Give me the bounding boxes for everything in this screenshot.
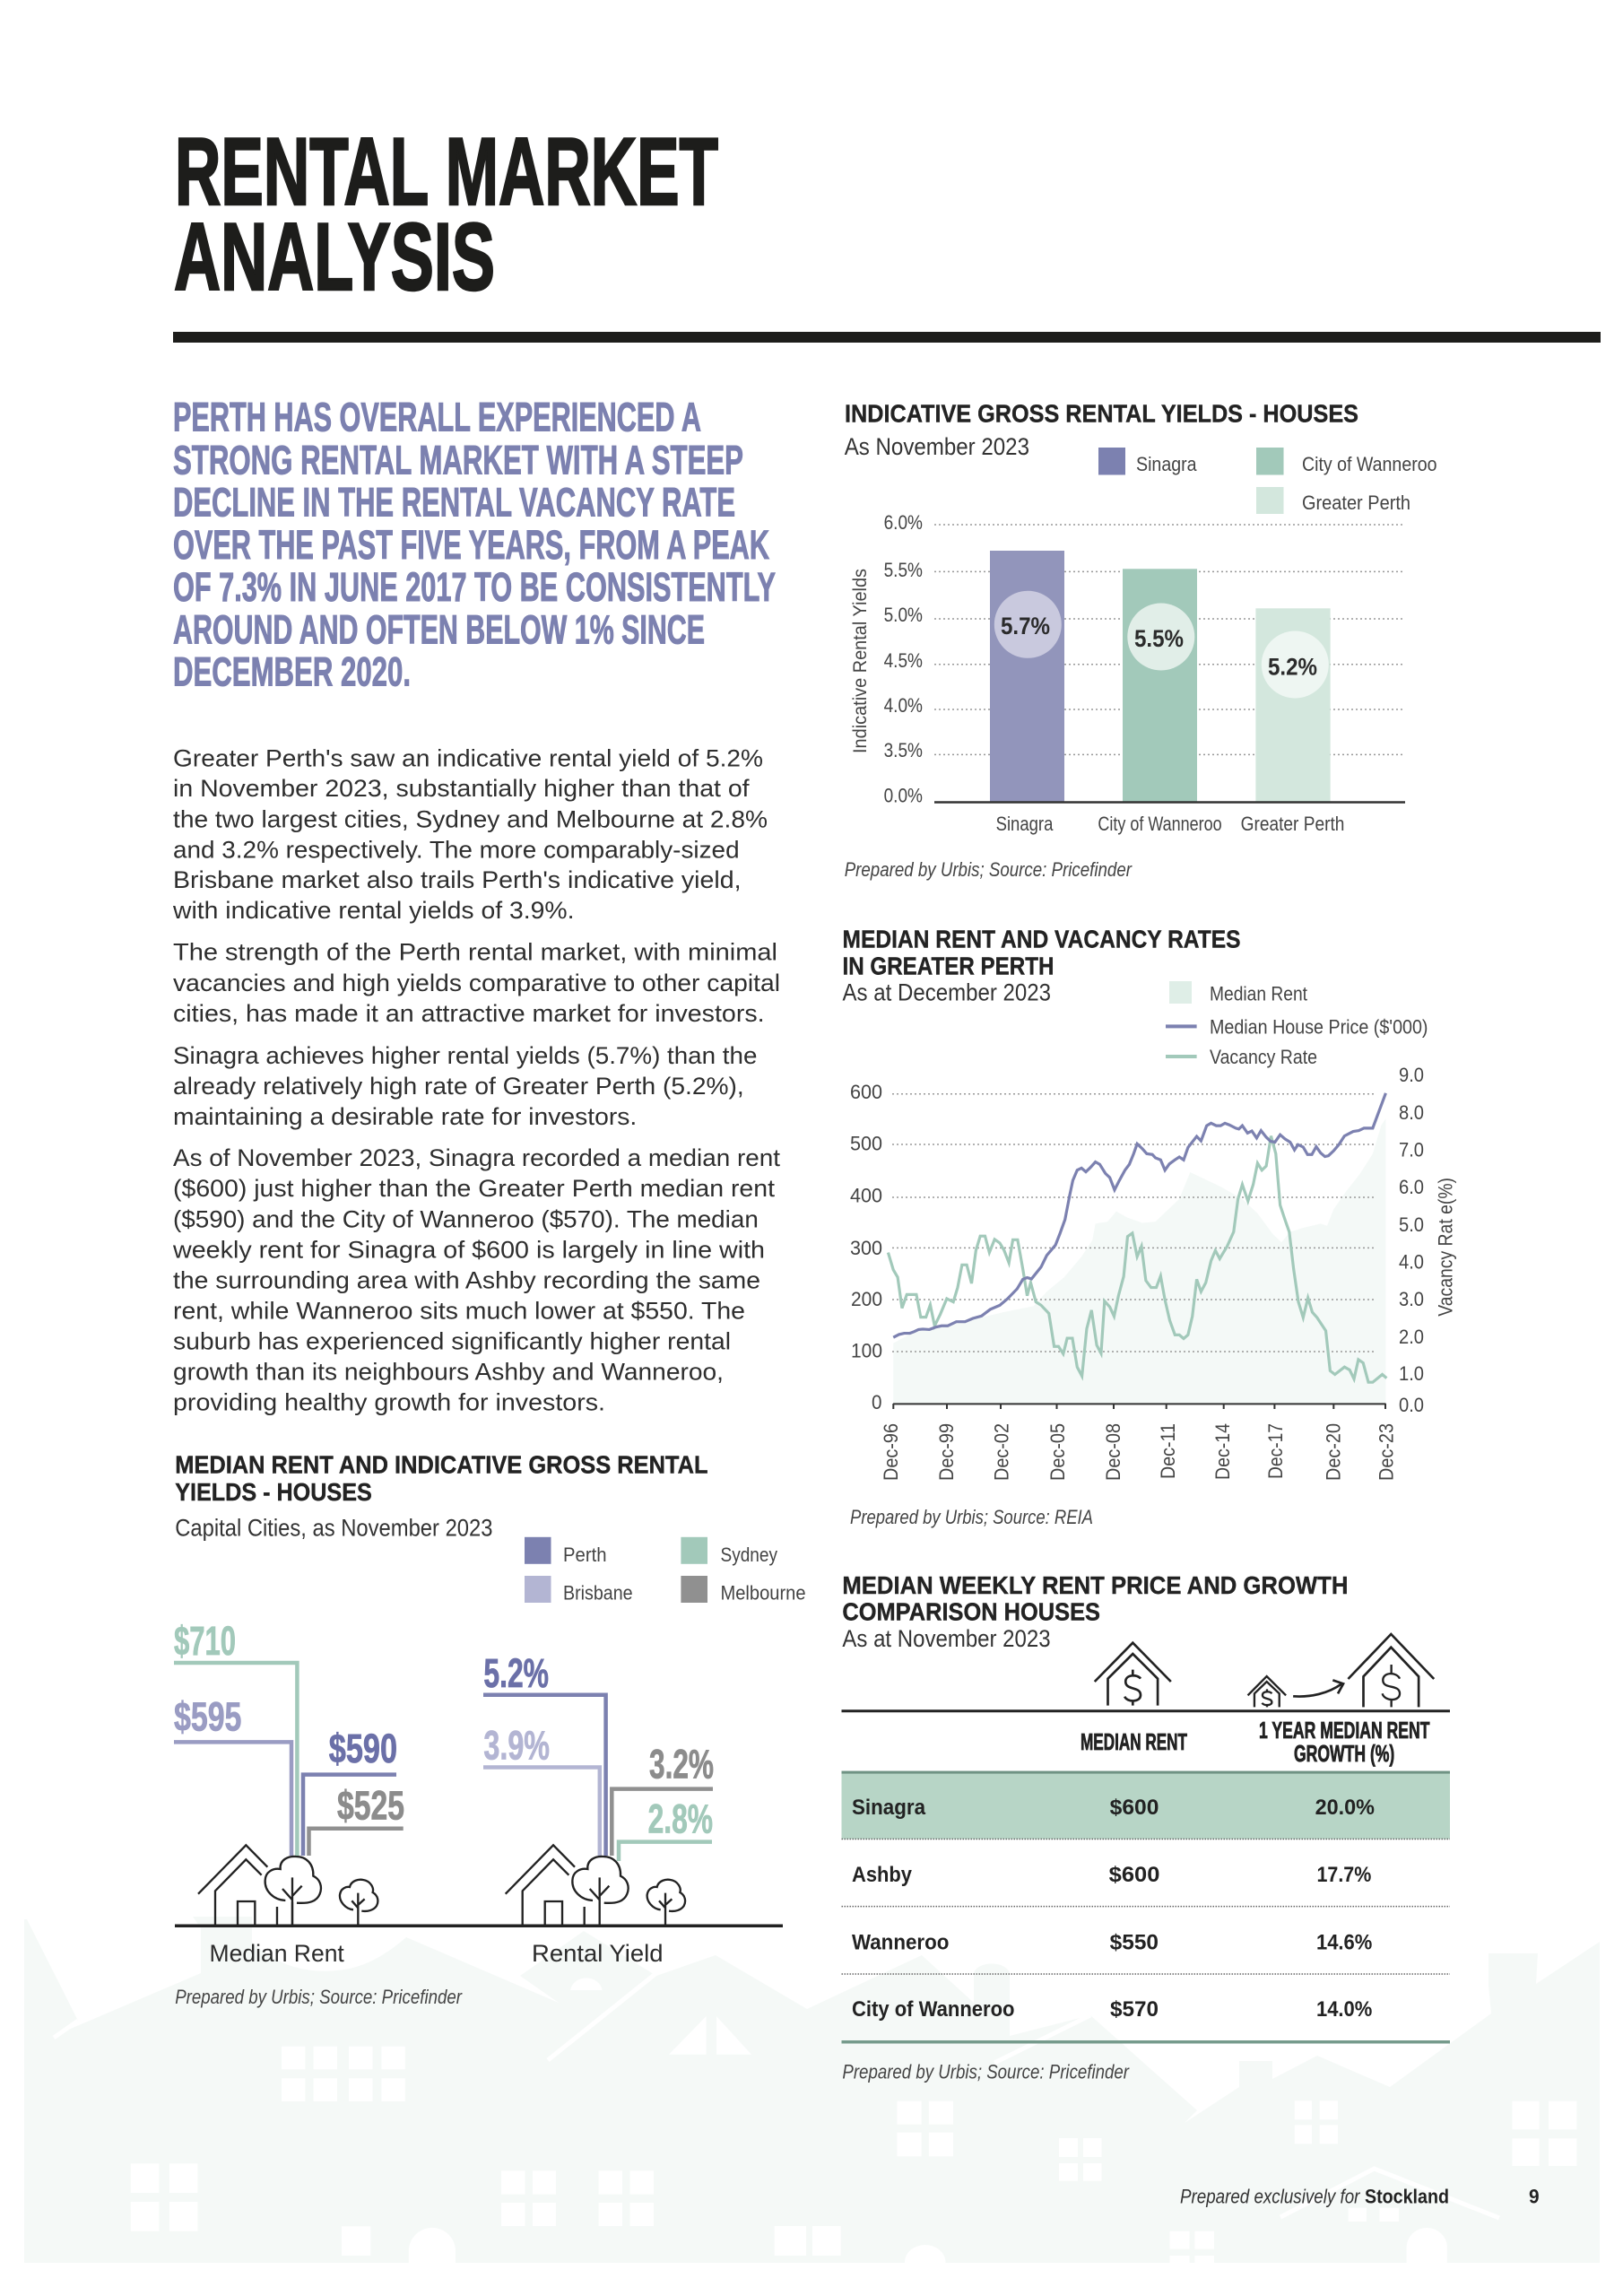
lead statement: STRONG RENTAL MARKET WITH A STEEP <box>173 437 743 483</box>
row: Wanneroo: Wanneroo <box>852 1930 949 1955</box>
x axis labels: Dec-96 <box>880 1423 902 1481</box>
rental yield connectors and values: 3.9% <box>483 1723 550 1769</box>
x axis labels: Dec-99 <box>935 1423 958 1481</box>
body text: vacancies and high yields comparative to other capital <box>173 970 780 996</box>
body text: growth than its neighbours Ashby and Wanneroo, <box>173 1358 724 1385</box>
subheading: Capital Cities, as November 2023 <box>175 1514 492 1541</box>
body text: maintaining a desirable rate for investors. <box>173 1103 637 1130</box>
right axis labels: 8.0 <box>1399 1101 1424 1124</box>
subheading: As at December 2023 <box>843 979 1051 1006</box>
y axis title: Indicative Rental Yields <box>850 569 871 753</box>
axis labels: Median Rent <box>210 1940 344 1967</box>
axis labels: Rental Yield <box>532 1940 664 1967</box>
panel: median rent and vacancy rates line chart <box>843 926 1457 1528</box>
axis labels <box>210 1940 664 1967</box>
category labels: Sinagra <box>996 813 1054 835</box>
row: Sinagra: Sinagra <box>852 1796 926 1820</box>
lead statement: PERTH HAS OVERALL EXPERIENCED A <box>173 395 701 440</box>
row: Ashby <box>852 1863 1371 1887</box>
rental yield connectors and values: 2.8% <box>648 1796 713 1841</box>
x axis labels: Dec-14 <box>1211 1423 1234 1480</box>
bar: City of Wanneroo 5.5%: 5.5% <box>1134 625 1184 652</box>
right axis labels: 3.0 <box>1399 1288 1424 1310</box>
lead statement: DECLINE IN THE RENTAL VACANCY RATE <box>173 479 735 526</box>
bar: Greater Perth 5.2%: 5.2% <box>1268 653 1317 680</box>
footer: Prepared exclusively for <box>1180 2186 1361 2208</box>
background: house silhouettes <box>24 1917 1600 2263</box>
y axis labels: 6.0% <box>884 511 923 534</box>
footer <box>1180 2186 1540 2208</box>
left axis labels: 0 <box>872 1391 882 1413</box>
body text: in November 2023, substantially higher than that of <box>173 775 750 802</box>
heading: INDICATIVE GROSS RENTAL YIELDS - HOUSES <box>845 400 1358 427</box>
x axis labels: Dec-02 <box>991 1423 1013 1481</box>
subheading: As November 2023 <box>845 433 1029 460</box>
median rent connectors and values: $595 <box>174 1693 241 1740</box>
legend: Sinagra <box>1136 453 1197 475</box>
legend: Melbourne <box>721 1582 805 1604</box>
line: median house price <box>893 1093 1385 1337</box>
body text <box>172 744 781 1415</box>
left axis labels: 200 <box>851 1288 882 1310</box>
body text: weekly rent for Sinagra of $600 is largely in line with <box>172 1236 765 1263</box>
legend: Median House Price ($'000) <box>1210 1016 1428 1039</box>
row: Wanneroo: $550 <box>1110 1930 1159 1955</box>
legend: Vacancy Rate <box>1210 1046 1317 1068</box>
rental yield connectors and values: 3.2% <box>649 1742 714 1787</box>
category labels: City of Wanneroo <box>1098 813 1222 835</box>
x axis labels: Dec-08 <box>1102 1423 1124 1481</box>
legend: Sydney <box>721 1544 777 1566</box>
x axis labels <box>880 1423 1398 1481</box>
icon: house and trees (rental yield) <box>506 1845 685 1926</box>
heading: COMPARISON HOUSES <box>842 1598 1100 1625</box>
body text: Brisbane market also trails Perth's indicative yield, <box>173 866 741 893</box>
x axis labels: Dec-17 <box>1264 1423 1287 1479</box>
y axis labels: 4.0% <box>884 694 923 717</box>
legend <box>525 1537 805 1604</box>
row: Sinagra: 20.0% <box>1315 1796 1375 1820</box>
body text: already relatively high rate of Greater Perth (5.2%), <box>173 1073 744 1100</box>
x axis labels: Dec-20 <box>1323 1423 1345 1481</box>
body text: Greater Perth's saw an indicative rental yield of 5.2% <box>173 744 763 771</box>
x axis with ticks <box>893 1404 1386 1409</box>
area: median rent <box>893 1118 1385 1405</box>
column headers: GROWTH (%) <box>1294 1740 1394 1767</box>
source: Prepared by Urbis; Source: Pricefinder <box>842 2060 1130 2083</box>
legend: Median Rent <box>1210 983 1307 1004</box>
y axis labels <box>884 511 923 807</box>
median rent connectors and values <box>174 1618 404 1856</box>
row: City of Wanneroo: 14.0% <box>1316 1997 1372 2022</box>
body text: ($600) just higher than the Greater Perth median rent <box>173 1175 776 1202</box>
rental yield connectors and values <box>483 1650 714 1861</box>
body text: the surrounding area with Ashby recording the same <box>173 1266 760 1293</box>
bar: Greater Perth 5.2% <box>1255 608 1331 802</box>
category labels: Greater Perth <box>1241 813 1344 835</box>
source: Prepared by Urbis; Source: REIA <box>850 1506 1093 1528</box>
right axis title: Vacancy Rat e(%) <box>1435 1178 1457 1317</box>
title: ANALYSIS <box>174 203 495 310</box>
bar: Sinagra 5.7% <box>990 551 1064 802</box>
body text: Sinagra achieves higher rental yields (5.7%) than the <box>173 1042 757 1069</box>
heading: MEDIAN RENT AND INDICATIVE GROSS RENTAL <box>175 1450 707 1478</box>
row: Ashby: $600 <box>1109 1863 1159 1887</box>
line: vacancy rate <box>888 1136 1386 1382</box>
column headers: 1 YEAR MEDIAN RENT <box>1259 1717 1430 1744</box>
body text: cities, has made it an attractive market for investors. <box>173 1000 765 1027</box>
title <box>174 117 718 310</box>
icon: small house growing to large house <box>1248 1634 1434 1707</box>
icon: house with dollar <box>1095 1643 1171 1706</box>
left axis labels <box>850 1081 882 1413</box>
left axis labels: 600 <box>850 1081 882 1103</box>
right axis labels: 5.0 <box>1399 1213 1424 1236</box>
column headers <box>1081 1717 1430 1767</box>
row: Wanneroo: 14.6% <box>1316 1930 1372 1955</box>
lead statement: DECEMBER 2020. <box>173 649 411 694</box>
right axis labels: 2.0 <box>1399 1326 1424 1348</box>
y axis labels: 4.5% <box>884 649 923 672</box>
row: Wanneroo <box>852 1930 1372 1955</box>
legend: City of Wanneroo <box>1302 453 1436 475</box>
category labels <box>996 813 1344 835</box>
lead statement: OF 7.3% IN JUNE 2017 TO BE CONSISTENTLY <box>173 564 776 610</box>
row: City of Wanneroo <box>852 1997 1372 2022</box>
body text: As of November 2023, Sinagra recorded a median rent <box>173 1144 781 1171</box>
x axis labels: Dec-23 <box>1376 1423 1398 1481</box>
body text: providing healthy growth for investors. <box>173 1388 605 1415</box>
row: Ashby: 17.7% <box>1316 1863 1371 1887</box>
left axis labels: 400 <box>850 1184 882 1207</box>
y axis labels: 3.5% <box>884 739 923 761</box>
body text: rent, while Wanneroo sits much lower at $550. The <box>173 1297 745 1324</box>
body text: the two largest cities, Sydney and Melbourne at 2.8% <box>173 805 768 832</box>
subheading: As at November 2023 <box>842 1625 1051 1652</box>
panel: median weekly rent comparison table <box>841 1571 1450 2083</box>
y axis labels: 0.0% <box>884 784 923 807</box>
legend: Brisbane <box>563 1582 633 1604</box>
title rule <box>173 332 1601 343</box>
heading: MEDIAN RENT AND VACANCY RATES <box>843 926 1241 953</box>
heading: MEDIAN WEEKLY RENT PRICE AND GROWTH <box>842 1571 1348 1599</box>
right axis labels: 7.0 <box>1399 1139 1424 1161</box>
body text: The strength of the Perth rental market, with minimal <box>173 939 777 966</box>
left axis labels: 500 <box>850 1133 882 1155</box>
median rent connectors and values: $525 <box>337 1783 404 1829</box>
heading: IN GREATER PERTH <box>843 952 1055 980</box>
row: Sinagra <box>841 1771 1450 1839</box>
y axis labels: 5.5% <box>884 559 923 581</box>
left axis labels: 300 <box>850 1237 882 1259</box>
heading: YIELDS - HOUSES <box>175 1478 372 1506</box>
panel: median rent and yields by capital city <box>174 1450 805 2008</box>
body text: with indicative rental yields of 3.9%. <box>172 897 574 924</box>
icon: house and trees (median rent) <box>198 1845 378 1926</box>
bar: Sinagra 5.7%: 5.7% <box>1001 613 1050 639</box>
right axis labels: 9.0 <box>1399 1064 1424 1086</box>
column headers: MEDIAN RENT <box>1081 1728 1187 1755</box>
right axis labels: 4.0 <box>1399 1250 1424 1273</box>
bar: City of Wanneroo 5.5% <box>1123 569 1197 802</box>
source: Prepared by Urbis; Source: Pricefinder <box>175 1986 463 2008</box>
row: City of Wanneroo: $570 <box>1110 1997 1159 2022</box>
legend: Greater Perth <box>1302 491 1410 514</box>
row: Ashby: Ashby <box>852 1863 913 1887</box>
x axis labels: Dec-11 <box>1157 1423 1179 1479</box>
heading <box>843 926 1241 980</box>
lead statement <box>173 395 776 694</box>
legend <box>1166 981 1428 1068</box>
heading <box>175 1450 707 1506</box>
title: RENTAL MARKET <box>175 117 718 225</box>
y axis labels: 5.0% <box>884 604 923 626</box>
heading <box>842 1571 1348 1625</box>
body text: ($590) and the City of Wanneroo ($570). The median <box>173 1205 759 1232</box>
footer: 9 <box>1529 2186 1540 2208</box>
x axis labels: Dec-05 <box>1046 1423 1069 1481</box>
rental yield connectors and values: 5.2% <box>483 1650 549 1696</box>
left axis labels: 100 <box>851 1340 882 1362</box>
row: Sinagra: $600 <box>1110 1796 1159 1820</box>
footer: Stockland <box>1365 2186 1449 2208</box>
right axis labels: 6.0 <box>1399 1176 1424 1198</box>
median rent connectors and values: $590 <box>329 1726 397 1771</box>
lead statement: AROUND AND OFTEN BELOW 1% SINCE <box>173 606 705 653</box>
legend: Perth <box>563 1544 606 1566</box>
panel: indicative gross rental yields bar chart <box>845 400 1436 881</box>
source: Prepared by Urbis; Source: Pricefinder <box>845 858 1133 881</box>
median rent connectors and values: $710 <box>174 1618 236 1664</box>
row: City of Wanneroo: City of Wanneroo <box>852 1997 1015 2022</box>
lead statement: OVER THE PAST FIVE YEARS, FROM A PEAK <box>173 522 769 568</box>
right axis labels: 1.0 <box>1399 1362 1424 1385</box>
legend <box>1098 448 1436 514</box>
body text: suburb has experienced significantly higher rental <box>173 1327 731 1354</box>
body text: and 3.2% respectively. The more comparably-sized <box>173 836 740 863</box>
right axis labels <box>1399 1064 1424 1416</box>
right axis labels: 0.0 <box>1399 1394 1424 1416</box>
